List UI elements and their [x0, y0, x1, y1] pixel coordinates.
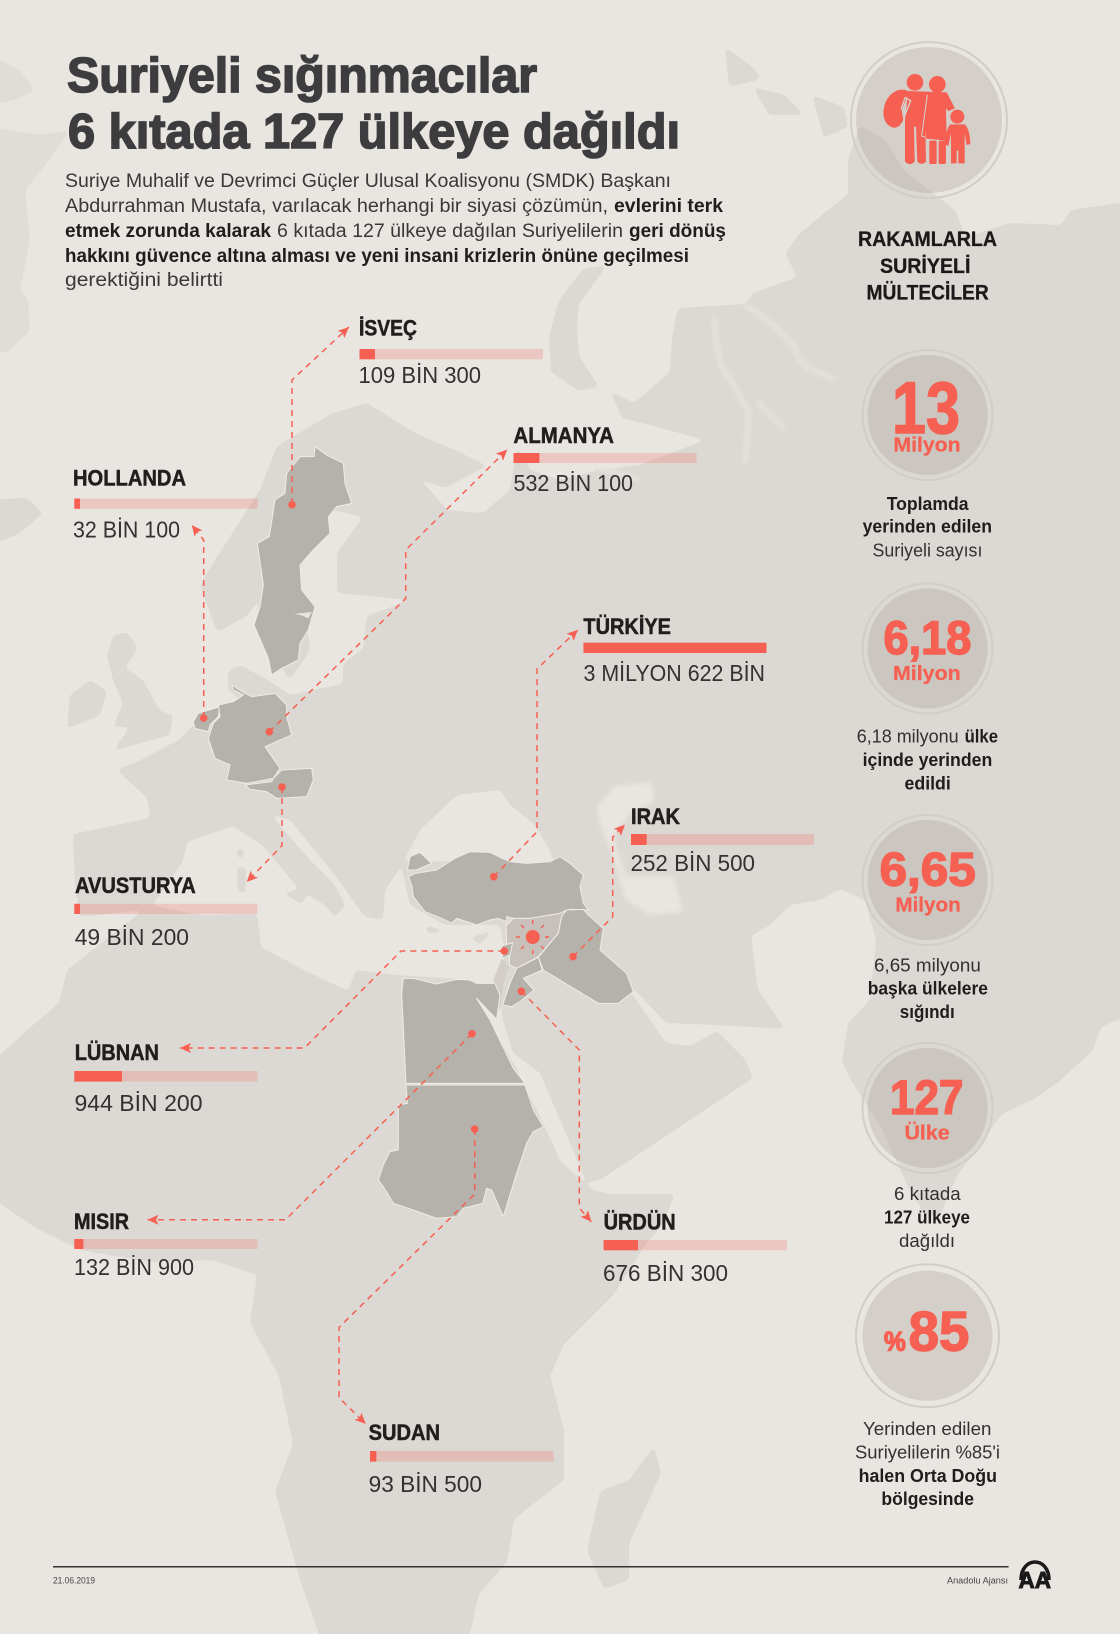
- stat: yüzde 85: bölgesinde: [881, 1488, 974, 1509]
- arrow: Ürdün: [518, 988, 591, 1222]
- country: Almanya: 532 BİN 100: [514, 470, 633, 496]
- country: Ürdün: 676 BİN 300: [603, 1260, 728, 1286]
- stat: 127 ülke: 6 kıtada: [894, 1183, 961, 1204]
- intro paragraph: gerektiğini belirtti: [65, 270, 223, 291]
- footer credit: Anadolu Ajansı: [947, 1576, 1008, 1586]
- stat: 6,18 milyon: 6,18: [884, 611, 971, 664]
- stat: 6,18 milyon: içinde yerinden: [863, 749, 992, 770]
- country: Lübnan: 944 BİN 200: [74, 1090, 202, 1116]
- stat: 127 ülke: 127: [890, 1072, 963, 1125]
- stat: 6,65 milyon: başka ülkelere: [868, 978, 988, 999]
- heading: Rakamlarla Suriyeli Mülteciler: MÜLTECİLER: [866, 279, 989, 304]
- footer date: 21.06.2019: [53, 1576, 95, 1586]
- stat: 6,18 milyon: 6,18 milyonu: [857, 726, 959, 747]
- stat: 6,65 milyon: 6,65 milyonu: [874, 954, 981, 975]
- arrow: Irak: [569, 825, 625, 960]
- country: Türkiye: 3 MİLYON 622 BİN: [584, 660, 765, 686]
- country: Ürdün: [603, 1210, 787, 1286]
- icon: refugee family: [883, 74, 970, 164]
- stat: 6,65 milyon: 6,65: [880, 842, 976, 896]
- intro paragraph: hakkını güvence altına alması ve yeni insani krizlerin önüne geçilmesi: [65, 246, 689, 267]
- country: Almanya: ALMANYA: [513, 423, 614, 448]
- title: [67, 49, 680, 159]
- country: Avusturya: AVUSTURYA: [75, 873, 196, 898]
- country: Hollanda: [73, 466, 258, 542]
- country: Sudan: [369, 1420, 554, 1497]
- arrow: Avusturya: [247, 783, 286, 882]
- country: Mısır: MISIR: [74, 1209, 129, 1234]
- stat: 6,18 milyon: [857, 584, 998, 793]
- title: Suriyeli sığınmacılar: [67, 49, 537, 103]
- intro paragraph: evlerini terk: [614, 196, 723, 217]
- stat: 127 ülke: 127 ülkeye: [884, 1206, 970, 1228]
- stat: 127 ülke: Ülke: [904, 1122, 950, 1145]
- country: İsveç: 109 BİN 300: [358, 362, 481, 388]
- country: Irak: [630, 804, 814, 876]
- arrow: Almanya: [266, 450, 507, 736]
- intro paragraph: [65, 171, 726, 291]
- country: İsveç: [358, 316, 543, 388]
- footer: [53, 1562, 1051, 1593]
- stat: yüzde 85: halen Orta Doğu: [859, 1465, 997, 1486]
- stat: 13 milyon: [863, 350, 993, 560]
- country: Irak: IRAK: [631, 804, 680, 829]
- heading: Rakamlarla Suriyeli Mülteciler: [858, 227, 997, 304]
- stat: 13 milyon: Milyon: [893, 434, 961, 457]
- turkey, syria, iraq, jordan, lebanon, egypt, sudan: [378, 852, 633, 1218]
- arrow: Sudan: [339, 1125, 479, 1424]
- intro paragraph: Suriye Muhalif ve Devrimci Güçler Ulusal Koalisyonu (SMDK) Başkanı: [65, 171, 671, 192]
- stat: yüzde 85: 85: [909, 1299, 969, 1362]
- stat: 13 milyon: Suriyeli sayısı: [872, 539, 982, 560]
- stat: 127 ülke: dağıldı: [899, 1230, 955, 1251]
- highlighted countries map: [193, 447, 633, 1218]
- stat: 6,65 milyon: sığındı: [900, 1001, 955, 1022]
- country: Avusturya: [74, 873, 257, 950]
- stat: 6,18 milyon: Milyon: [893, 662, 961, 685]
- country: Avusturya: 49 BİN 200: [75, 924, 189, 950]
- intro paragraph: etmek zorunda kalarak: [65, 221, 271, 242]
- stat: 13 milyon: yerinden edilen: [863, 516, 992, 537]
- stat: 13 milyon: 13: [892, 368, 960, 449]
- country: Mısır: [74, 1209, 257, 1280]
- stat: yüzde 85: %: [884, 1326, 906, 1356]
- stat: 6,18 milyon: ülke: [965, 726, 998, 747]
- heading: Rakamlarla Suriyeli Mülteciler: RAKAMLARLA: [858, 227, 997, 251]
- arrow: Lübnan: [180, 947, 508, 1048]
- country: Sudan: 93 BİN 500: [369, 1471, 482, 1497]
- country: Lübnan: LÜBNAN: [75, 1040, 159, 1065]
- country: Türkiye: [583, 614, 766, 686]
- country: İsveç: İSVEÇ: [359, 316, 417, 340]
- country: Ürdün: ÜRDÜN: [604, 1210, 676, 1234]
- stat: yüzde 85: [855, 1264, 1000, 1509]
- country: Hollanda: 32 BİN 100: [73, 516, 180, 542]
- stat: 13 milyon: Toplamda: [887, 493, 969, 514]
- stat: 127 ülke: [863, 1043, 993, 1251]
- sweden, netherlands, germany, austria: [193, 447, 352, 798]
- country: Almanya: [513, 423, 696, 496]
- title: 6 kıtada 127 ülkeye dağıldı: [68, 105, 680, 159]
- stat: 6,18 milyon: edildi: [904, 772, 951, 793]
- country: Hollanda: HOLLANDA: [73, 466, 186, 490]
- arrow: Hollanda: [192, 525, 208, 722]
- arrow: İsveç: [288, 327, 349, 509]
- stat: yüzde 85: Yerinden edilen: [863, 1418, 991, 1439]
- arrow: Mısır: [148, 1030, 476, 1220]
- country: Mısır: 132 BİN 900: [74, 1254, 194, 1280]
- intro paragraph: Abdurrahman Mustafa, varılacak herhangi bir siyasi çözümün,: [65, 196, 608, 217]
- country: Sudan: SUDAN: [369, 1420, 440, 1445]
- country: Türkiye: TÜRKİYE: [583, 614, 671, 639]
- arrow: Türkiye: [490, 630, 578, 880]
- heading: Rakamlarla Suriyeli Mülteciler: SURİYELİ: [880, 254, 970, 278]
- intro paragraph: 6 kıtada 127 ülkeye dağılan Suriyelilerin: [277, 221, 623, 242]
- stat: 6,65 milyon: [863, 815, 993, 1022]
- stat: 6,65 milyon: Milyon: [895, 894, 961, 917]
- country: Irak: 252 BİN 500: [630, 850, 755, 876]
- icon: syria conflict burst: [516, 920, 549, 954]
- panel: family icon badge: [851, 42, 1007, 198]
- icon: Anadolu Ajansı logo: AA: [1018, 1567, 1051, 1593]
- intro paragraph: geri dönüş: [629, 221, 726, 242]
- stat: yüzde 85: Suriyelilerin %85'i: [855, 1441, 1000, 1462]
- country: Lübnan: [74, 1040, 257, 1116]
